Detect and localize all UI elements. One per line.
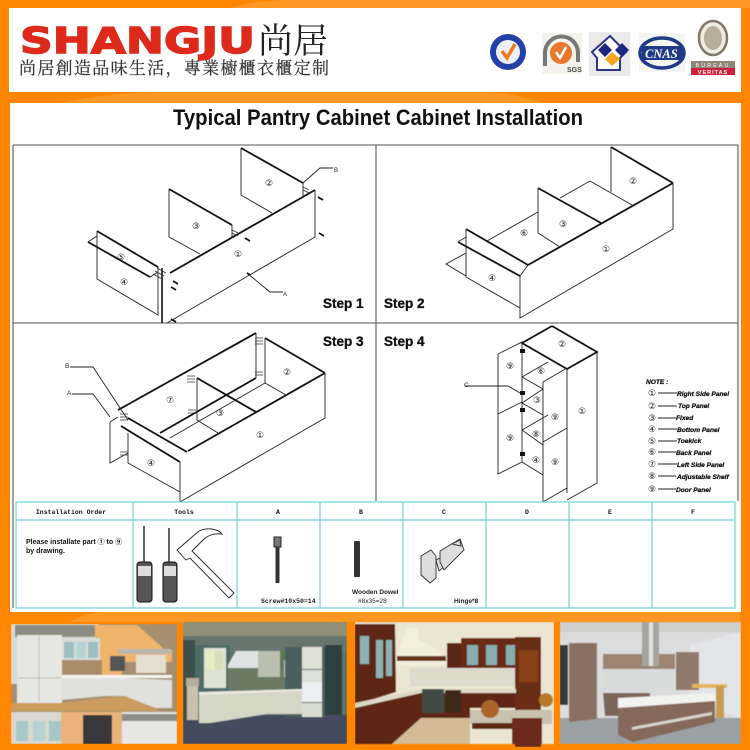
icon: CNAS: CNAS (645, 47, 678, 61)
table: hardware and tools: C (442, 509, 446, 516)
icon: SGS badge: SGS (567, 67, 582, 74)
legend: parts note: ⑦ (648, 460, 656, 470)
table: hardware and tools: by drawing. (26, 548, 65, 555)
photo: white kitchen (11, 624, 177, 744)
icon: house certification (589, 32, 630, 76)
table: hardware and tools (16, 502, 735, 608)
diagram: step 4: ⑨ (506, 362, 514, 372)
diagram: step 1: ② (265, 179, 273, 189)
photo: modern kitchen (560, 622, 741, 744)
diagram: step 2: ③ (559, 220, 567, 230)
table: hardware and tools: Tools (174, 509, 194, 516)
label: step 2: Step 2 (384, 296, 425, 311)
icon: Bureau Veritas (691, 21, 735, 76)
diagram: step 2: ② (629, 177, 637, 187)
table: hardware and tools: D (525, 509, 529, 516)
legend: parts note: Toekick (677, 438, 702, 445)
icon: hinge (421, 539, 464, 583)
diagram: step 1: ① (234, 250, 242, 260)
label: step 3: Step 3 (323, 334, 364, 349)
legend: parts note: Top Panel (678, 403, 709, 410)
diagram: step 4 (384, 326, 597, 502)
logo wordmark: SHANGJU (20, 21, 255, 62)
legend: parts note: ① (648, 389, 656, 399)
legend: parts note: Door Panel (676, 487, 711, 494)
legend: parts note: Right Side Panel (677, 391, 729, 398)
title: Typical Pantry Cabinet Cabinet Installation (173, 105, 583, 130)
legend: parts note: ② (648, 402, 656, 412)
diagram: step 4: ③ (533, 396, 541, 406)
legend: parts note: Bottom Panel (677, 427, 720, 434)
table: hardware and tools: Installation Order (36, 509, 106, 516)
diagram: step 2: ④ (488, 274, 496, 284)
icon: Bureau Veritas: BUREAU (696, 63, 730, 69)
table: hardware and tools: B (359, 509, 363, 516)
diagram: step 2: ⑥ (520, 229, 528, 239)
diagram: step 1: ③ (192, 222, 200, 232)
diagram: step 3: ② (283, 368, 291, 378)
icon: SGS badge (542, 33, 582, 74)
diagram: step 4: ④ (532, 456, 540, 466)
icon: wooden dowel (354, 541, 360, 577)
diagram: step 2: ① (602, 245, 610, 255)
diagram: step 2 (384, 147, 673, 318)
diagram: step 3: A (67, 390, 72, 397)
slogan: 尚居創造品味生活，專業櫥櫃衣櫃定制 (19, 54, 329, 79)
legend: parts note: ⑤ (648, 437, 656, 447)
diagram: step 4: C (464, 382, 469, 389)
table: hardware and tools: Hinge*8 (454, 598, 479, 605)
icon: CNAS (639, 33, 685, 72)
diagram: step 1: ④ (120, 278, 128, 288)
diagram: step 3: ① (256, 431, 264, 441)
legend: parts note: Fixed (676, 415, 694, 422)
legend: parts note: Adjustable Shelf (676, 474, 729, 481)
diagram: step 3: ⑦ (166, 396, 174, 406)
diagram: step 1: B (334, 168, 338, 174)
panel: installation drawing (10, 103, 741, 612)
legend: parts note: NOTE : (646, 379, 668, 386)
icon: Bureau Veritas: VERITAS (698, 70, 728, 76)
legend: parts note: ⑨ (648, 485, 656, 495)
legend: parts note: Left Side Panel (677, 462, 724, 469)
legend: parts note: Back Panel (676, 450, 711, 457)
icon: hammer (177, 529, 234, 598)
icon: quality badge (490, 34, 526, 70)
icon: screwdrivers (137, 526, 177, 602)
diagram: step 4: ⑨ (506, 434, 514, 444)
diagram: step 1 (88, 148, 364, 323)
legend: parts note: ③ (648, 414, 656, 424)
diagram: step 3: ④ (147, 459, 155, 469)
diagram: step 4: ⑧ (532, 430, 540, 440)
label: step 4: Step 4 (384, 334, 425, 349)
table: hardware and tools: Please installate part ① to ⑨ (26, 538, 122, 546)
diagram: step 4: ② (558, 340, 566, 350)
diagram: step 4: ⑨ (551, 458, 559, 468)
table: hardware and tools: Wooden Dowel (352, 589, 399, 596)
legend: parts note (646, 379, 729, 495)
table: hardware and tools: Screw#10x50=14 (261, 598, 316, 605)
diagram: step 3: ③ (216, 409, 224, 419)
panel: header (9, 8, 741, 92)
icon: screw (274, 537, 281, 583)
diagram: step 1: ⑤ (117, 253, 125, 263)
diagram: step 3: B (65, 363, 69, 370)
legend: parts note: ⑥ (648, 448, 656, 458)
diagram: step 4: ① (578, 407, 586, 417)
legend: parts note: ④ (648, 425, 656, 435)
table: hardware and tools: E (608, 509, 612, 516)
diagram: step 4: ⑥ (537, 367, 545, 377)
logo Chinese name: 尚居 (258, 14, 328, 64)
legend: parts note: ⑧ (648, 472, 656, 482)
label: step 1: Step 1 (323, 296, 364, 311)
table: hardware and tools: A (276, 509, 280, 516)
diagram: step 1: A (283, 292, 287, 298)
diagram: step 3 (65, 333, 364, 502)
photo: green-trim kitchen (183, 622, 347, 744)
table: hardware and tools: #8x35=28 (358, 598, 387, 605)
table: hardware and tools: F (691, 509, 695, 516)
diagram: step 4: ⑨ (551, 413, 559, 423)
photo: wooden kitchen (355, 622, 554, 747)
